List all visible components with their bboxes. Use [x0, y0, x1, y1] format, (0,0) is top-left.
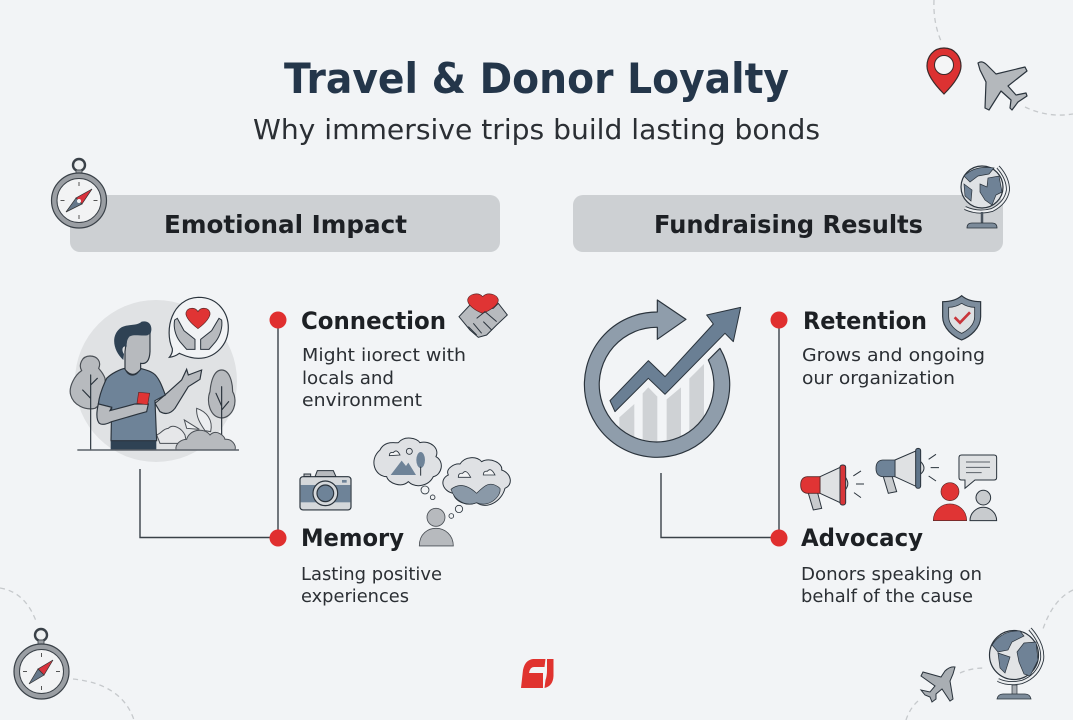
marker: memory [270, 530, 286, 546]
illustration: traveller with trees [70, 297, 239, 462]
right tree [208, 370, 235, 437]
trend arrow [610, 307, 741, 412]
icon: megaphones and people [801, 448, 997, 521]
marker: advocacy [770, 530, 788, 546]
text: connection [301, 307, 466, 411]
blue megaphone [876, 448, 939, 493]
text: memory: Memory [301, 524, 404, 552]
panel: emotional impact [70, 294, 510, 607]
icon: airplane top [978, 62, 1027, 110]
text: advocacy [801, 524, 982, 607]
panel: fundraising results header [573, 195, 1003, 252]
panel: emotional impact header [70, 195, 500, 252]
speech bubble with heart [169, 297, 228, 358]
text: advocacy: Donors speaking on [801, 564, 982, 585]
icon: map pin [927, 48, 961, 94]
bushes [157, 408, 235, 450]
subtitle: Why immersive trips build lasting bonds [253, 113, 820, 146]
icon: globe header [961, 166, 1008, 228]
icon: thought clouds and person [374, 438, 510, 546]
panel: fundraising results header: Fundraising Results [654, 210, 923, 239]
icon: camera [300, 471, 351, 510]
red megaphone [801, 465, 864, 510]
icon: airplane bottom [921, 667, 955, 702]
chart: circular growth arrow [584, 300, 741, 457]
text: memory: experiences [301, 586, 409, 607]
text: retention: Retention [803, 307, 927, 335]
text: advocacy: behalf of the cause [801, 586, 973, 607]
connector [140, 320, 278, 538]
icon: compass bottom left [14, 629, 69, 699]
left tree [70, 356, 105, 450]
text: memory: Lasting positive [301, 564, 442, 585]
rising bars [619, 364, 704, 447]
text: memory [301, 524, 442, 607]
connector [661, 320, 779, 538]
text: connection: locals and [302, 368, 394, 389]
marker: retention [770, 312, 788, 328]
icon: handshake with heart [459, 294, 507, 337]
people [933, 483, 997, 521]
panel: emotional impact header: Emotional Impact [164, 210, 407, 239]
icon: globe bottom [990, 629, 1042, 699]
text: connection: Connection [301, 307, 446, 335]
text: retention [802, 307, 985, 389]
icon: shield [943, 296, 981, 340]
person [97, 321, 202, 450]
icon: compass header [52, 159, 106, 228]
text: connection: environment [302, 390, 422, 411]
panel: fundraising results [584, 296, 997, 607]
ring arrow [584, 300, 730, 457]
speech bubble [959, 455, 997, 488]
text: retention: Grows and ongoing [802, 345, 985, 366]
text: connection: Might iıorect with [302, 345, 466, 366]
text: retention: our organization [802, 368, 955, 389]
title: Travel & Donor Loyalty [284, 54, 789, 103]
ground line [77, 448, 239, 452]
marker: connection [270, 312, 286, 328]
text: advocacy: Advocacy [801, 524, 923, 552]
icon: logo mark [521, 659, 554, 688]
